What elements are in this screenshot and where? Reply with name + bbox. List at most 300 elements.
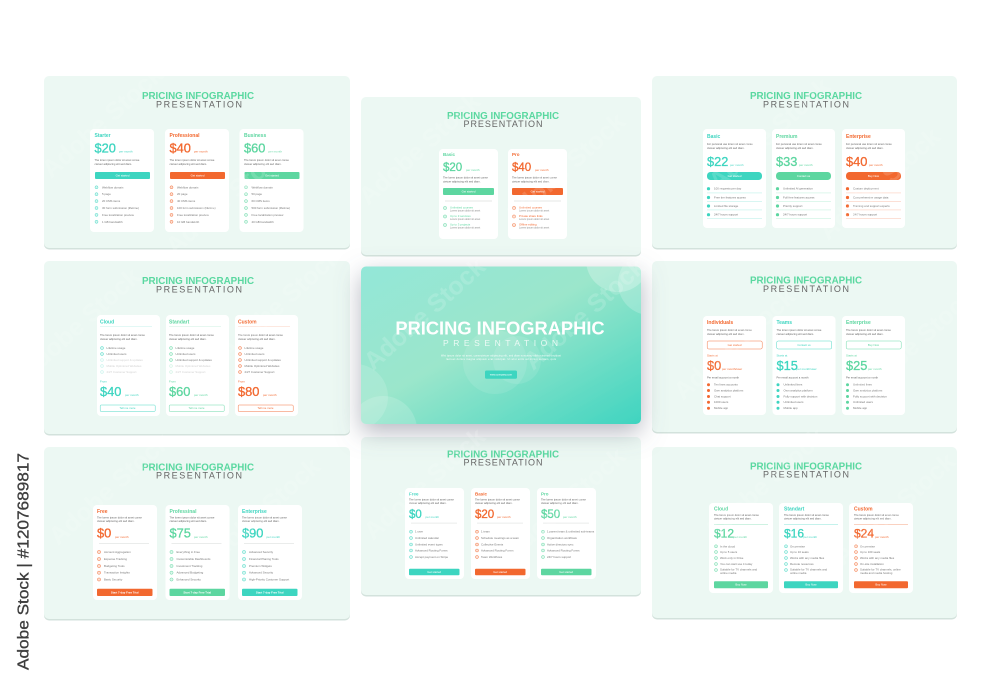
card: Cloud: In the cloud <box>720 544 735 548</box>
watermarks: repeating stock overlay: Adobe Stock <box>519 252 651 376</box>
card: Cloud: $12 <box>714 527 734 541</box>
card: Standard: Standart <box>784 506 805 512</box>
card: Custom: The lorem ipsum dolor sit amet conse <box>854 513 899 517</box>
card: Pro: per month <box>563 515 577 519</box>
card: Standard: The lorem ipsum dolor sit amet conse <box>784 513 829 517</box>
card: Custom: per month <box>263 393 277 397</box>
card: Enterprise: Fully support with decision <box>853 394 887 398</box>
card: Individuals: Chat support <box>714 394 731 398</box>
card: Pro: Private share links <box>519 214 543 218</box>
card: Pro: Pro <box>512 152 520 157</box>
card: Free: Expense Tracking <box>104 557 127 561</box>
card: Premium: ctetuer adipiscing elit sed diam. <box>776 146 814 150</box>
card: Basic: Collective Events <box>481 542 504 546</box>
card: Business: 60 CMS items <box>252 199 270 203</box>
card: Business: per month <box>268 150 282 154</box>
card: Enterprise: $90 <box>242 526 263 541</box>
card: Basic: $22 <box>707 154 728 169</box>
card: Pro: Lorem ipsum dolor sit amet <box>519 226 549 230</box>
card: Basic: ctetuer adipiscing elit sed diam. <box>475 501 513 505</box>
card: Pro: ctetuer adipiscing elit sed diam. <box>512 180 550 184</box>
card: Basic: Free tier features access <box>714 195 746 199</box>
card: Individuals: Own analytics platform <box>714 388 744 392</box>
card: Professional: 10 GB bandwidth <box>177 220 200 224</box>
card: Standard: ctetuer adipiscing elit sed diam. <box>169 337 207 341</box>
card: Standard: Mobile Optimized Websites <box>176 364 211 368</box>
card: Professional: $75 <box>170 526 191 541</box>
card: Teams: Fully support with decision <box>784 394 818 398</box>
card: Enterprise: The lorem ipsum dolor sit amet conse <box>242 516 287 520</box>
card: Cloud: Unlimited support & updates <box>106 358 143 362</box>
card: Cloud: Tell me more <box>119 406 136 410</box>
card: Teams: Per email account a month <box>776 376 809 380</box>
card: Basic: For personal use lorem sit amet conse <box>707 142 753 146</box>
heading: top-centre slide <box>447 111 559 129</box>
card: Starter: 20 CMS items <box>102 199 121 203</box>
card: Pro: 1 parent team & unlimited sub-teams <box>547 530 595 534</box>
heading: middle-right slide <box>750 276 862 294</box>
card: Enterprise <box>842 316 905 415</box>
heading: middle-right slide: PRICING INFOGRAPHIC <box>750 276 862 286</box>
card: Basic <box>439 149 498 239</box>
card: Basic: Get started <box>493 570 508 574</box>
card: Free: Free <box>409 491 419 496</box>
card: Starter: The lorem ipsum dolor sit amet conse <box>94 158 140 162</box>
card: Cloud: Up to 5 users <box>720 550 738 554</box>
card: Enterprise: Starts at <box>846 354 857 358</box>
card: Individuals: Ten lines accounts <box>714 383 738 387</box>
card: Cloud: ctetuer adipiscing elit sed diam. <box>100 337 138 341</box>
card: Pro: Get started <box>531 190 545 194</box>
panel: top-right three-plan pricing slide <box>652 76 957 250</box>
card: Teams: Contact us <box>797 343 811 347</box>
card: Enterprise: Per email account a month <box>846 376 878 380</box>
card: Enterprise: The lorem ipsum dolor sit amet conse <box>846 328 891 332</box>
card: Business: 50 page <box>252 192 262 196</box>
card: Professional: ctetuer adipiscing elit sed diam. <box>170 519 207 523</box>
card: Basic: 1 team <box>481 530 490 534</box>
card: Basic: $20 <box>475 509 494 521</box>
card: Enterprise: High-Priority Customer Support <box>249 578 289 582</box>
heading: bottom-centre slide: PRESENTATION <box>464 458 542 468</box>
card: Basic: 100 requests per day <box>714 186 742 190</box>
card: Custom: media and media hosting <box>860 571 893 575</box>
card: Cloud: Work only in Drive <box>720 556 744 560</box>
card: Pro: Unlimited courses <box>519 206 543 210</box>
card: Standard: online media <box>790 571 807 575</box>
card: Custom: $80 <box>238 384 259 399</box>
card: Basic: Schedule meetings as a team <box>481 536 520 540</box>
card: Pro <box>508 149 567 239</box>
card: Cloud: The lorem ipsum dolor sit amet conse <box>100 333 145 337</box>
card: Custom: 24/7 Customer Support <box>244 370 275 374</box>
card: Free <box>405 488 464 579</box>
card: Basic: Get started <box>728 174 742 178</box>
card: Free <box>93 505 157 600</box>
card: Basic <box>703 129 766 228</box>
card: Custom: ctetuer adipiscing elit sed diam. <box>238 337 276 341</box>
card: Basic: Up to 3 projects <box>450 222 471 226</box>
card: Basic: 24/7 hours support <box>714 212 738 216</box>
card: Premium: Premium <box>776 134 798 140</box>
card: Enterprise: $25 <box>846 358 867 373</box>
watermarks: repeating stock overlay: Adobe Stock <box>354 87 486 211</box>
card: Pro: Lorem ipsum dolor sit amet <box>519 210 549 212</box>
card: Standard: Unlimited support & updates <box>176 358 212 362</box>
card: Cloud: Suitable for TV channels and <box>720 568 757 572</box>
card: Starter: Starter <box>94 133 111 139</box>
card: Free: Budgeting Tools <box>104 564 125 568</box>
panel: centre hero cover slide <box>348 260 654 446</box>
card: Free: The lorem ipsum dolor sit amet conse <box>409 498 454 502</box>
card: Premium: per month <box>799 163 813 167</box>
card: Enterprise <box>842 129 905 228</box>
card: Free: Free <box>97 509 108 515</box>
card: Free: ctetuer adipiscing elit sed diam. <box>409 501 447 505</box>
card: Enterprise: ctetuer adipiscing elit sed diam. <box>846 146 884 150</box>
card: Custom: Works with any media files <box>860 556 895 560</box>
card: Professional <box>166 505 230 600</box>
card: Individuals: per month/user <box>722 367 742 371</box>
card: Custom: Unlimited users <box>244 352 265 356</box>
card: Free: The lorem ipsum dolor sit amet conse <box>97 516 142 520</box>
card: Custom <box>235 315 298 416</box>
card: Enterprise: Mobile app <box>853 406 868 410</box>
card: Individuals: The lorem ipsum dolor sit amet conse <box>707 328 752 332</box>
card: Free: $0 <box>409 509 422 521</box>
card: Enterprise: Premium Widgets <box>249 564 272 568</box>
card: Professional: Start 7-day Free Trial <box>183 590 211 594</box>
watermarks: repeating stock overlay: Adobe Stock <box>499 107 631 231</box>
card: Basic: ctetuer adipiscing elit sed diam. <box>443 180 481 184</box>
card: Free: Account Aggregation <box>104 550 131 554</box>
card: Cloud: Cloud <box>714 506 728 512</box>
card: Teams: ctetuer adipiscing elit sed diam. <box>776 332 814 336</box>
card: Premium: $33 <box>776 154 797 169</box>
card: Pro: Get started <box>559 570 574 574</box>
card: Starter: 1 GB bandwidth <box>102 220 123 224</box>
panel: middle-left three-plan pricing slide <box>44 261 350 436</box>
card: Standard: Unlimited users <box>176 352 196 356</box>
watermarks: repeating stock overlay: Adobe Stock <box>699 422 831 546</box>
text block: vertical stock credit: Adobe Stock | #1207689817 <box>16 453 32 670</box>
heading: top-centre slide: PRICING INFOGRAPHIC <box>447 111 559 122</box>
heading: top-left slide: PRESENTATION <box>156 100 242 110</box>
card: Individuals: Get started <box>728 343 742 347</box>
card: Individuals: Starts at <box>707 354 718 358</box>
watermarks: repeating stock overlay: Adobe Stock <box>359 252 491 376</box>
card: Free: Unlimited calendar <box>415 536 439 540</box>
card: Pro <box>537 488 596 579</box>
card: Pro: Advanced Routing Forms <box>547 548 580 552</box>
card: Professional: 20 page <box>177 192 188 196</box>
card: Pro: Lorem ipsum dolor sit amet <box>519 218 549 221</box>
watermarks: repeating stock overlay <box>14 60 981 576</box>
card: Basic: The lorem ipsum dolor sit amet conse <box>475 498 520 502</box>
heading: bottom-left slide: PRESENTATION <box>156 471 242 481</box>
card: Custom: Custom <box>238 320 257 326</box>
panel: bottom-centre three-plan pricing slide <box>361 437 641 596</box>
card: Business <box>240 129 304 232</box>
watermarks: repeating stock overlay: Adobe Stock <box>814 122 946 246</box>
card: Free: ctetuer adipiscing elit sed diam. <box>97 519 135 523</box>
card: Standard: The lorem ipsum dolor sit amet conse <box>169 333 214 337</box>
card: Cloud: per month <box>734 535 747 539</box>
card: Cloud: 24/7 Customer Support <box>106 370 137 374</box>
card: Standard: Works with any media files <box>790 556 825 560</box>
card: Starter: $20 <box>94 141 116 156</box>
card: Cloud: ctetuer adipiscing elit sed diam. <box>714 517 752 521</box>
card: Teams: Teams <box>776 320 792 326</box>
card: Professional: per month <box>194 150 208 154</box>
card: Professional: ctetuer adipiscing elit sed diam. <box>170 162 207 166</box>
card: Teams: The lorem ipsum dolor sit amet conse <box>776 328 822 332</box>
card: Enterprise: Unlimited lines <box>853 383 872 387</box>
watermarks: repeating stock overlay: Adobe Stock <box>704 72 836 196</box>
card: Teams: Unlimited lines <box>784 383 803 387</box>
card: Free: per month <box>115 535 129 539</box>
card: Individuals: $0 <box>707 358 721 373</box>
card: Free: Start 7-day Free Trial <box>111 590 139 594</box>
card: Standard: From <box>169 380 176 384</box>
card: Business: Free localization preview <box>252 213 284 217</box>
heading: top-right slide: PRESENTATION <box>763 100 849 110</box>
card: Free: per month <box>426 515 439 519</box>
card: Business: ctetuer adipiscing elit sed diam. <box>244 162 282 166</box>
card: Enterprise: Buy Now <box>868 174 880 178</box>
card: Standard: $60 <box>169 384 190 399</box>
card: Cloud <box>709 503 773 593</box>
heading: bottom-left slide <box>142 462 254 481</box>
card: Basic: per month <box>730 163 744 167</box>
card: Professional: The lorem ipsum dolor sit amet conse <box>170 158 215 162</box>
card: Standard: Buy Now <box>805 583 818 587</box>
card: Basic: Lorem ipsum dolor sit amet <box>450 218 480 221</box>
card: Cloud: Unlimited users <box>106 352 127 356</box>
heading: hero title: PRICING INFOGRAPHIC <box>395 318 605 338</box>
card: Teams: Unlimited users <box>784 400 804 404</box>
card: Enterprise: Enterprise <box>846 320 871 326</box>
card: Free: Transaction Insights <box>104 571 130 575</box>
card: Standard: Tell me more <box>188 406 205 410</box>
card: Basic: Basic <box>707 134 721 140</box>
card: Business: 500 form submission (lifetime) <box>252 206 290 210</box>
card: Basic: Lorem ipsum dolor sit amet <box>450 210 480 212</box>
card: Custom: On premise <box>860 544 875 548</box>
watermarks: repeating stock overlay: Adobe Stock <box>359 422 491 546</box>
card: Free: Get started <box>427 570 442 574</box>
card: Basic: Up to 3 services <box>450 214 471 218</box>
watermarks: repeating stock overlay: Adobe Stock <box>849 282 981 406</box>
card: Enterprise: Own analytics platform <box>853 388 883 392</box>
card: Basic: Basic <box>443 152 456 157</box>
card: Business: Webflow domain <box>252 185 273 189</box>
card: Professional: Professional <box>170 133 200 139</box>
card: Custom: Up to 100 seats <box>860 550 881 554</box>
card: Custom: Suitable for TV channels, online <box>860 568 901 572</box>
card: Basic: ctetuer adipiscing elit sed diam. <box>707 146 745 150</box>
heading: top-right slide <box>750 91 862 110</box>
heading: top-left slide: PRICING INFOGRAPHIC <box>142 91 254 102</box>
heading: bottom-centre slide <box>447 450 559 468</box>
card: Basic: Team Workflows <box>481 555 503 559</box>
card: Teams: Starts at <box>776 354 787 358</box>
card: Cloud: Mobile Optimized Websites <box>106 364 142 368</box>
card: Business: Get started <box>265 174 279 178</box>
card: Pro: The lorem ipsum dolor sit amet conse <box>541 498 586 502</box>
card: Free: Accept payment on Stripe <box>415 555 448 559</box>
heading: bottom-centre slide: PRICING INFOGRAPHIC <box>447 450 559 461</box>
button: hero website link <box>485 370 517 379</box>
card: Custom: per month <box>875 535 889 539</box>
card: Professional: Free localization preview <box>177 213 210 217</box>
heading: middle-left slide <box>142 276 254 295</box>
card: Basic: Lorem ipsum dolor sit amet <box>450 226 480 230</box>
text block: hero description: Wisi ipsum dolor sit amet, consectetuer adipiscing elit, sed diam nonummy nibh euismod tincidunt <box>441 354 561 358</box>
watermarks: repeating stock overlay: Adobe Stock <box>829 447 961 571</box>
card: Standard: On premise <box>790 544 805 548</box>
card: Pro: Organization workflows <box>547 536 577 540</box>
card: Professional: Enhanced Security <box>176 578 201 582</box>
heading: middle-right slide: PRESENTATION <box>763 284 849 294</box>
card: Standard: $16 <box>784 527 804 541</box>
card: Custom: The lorem ipsum dolor sit amet conse <box>238 333 283 337</box>
card: Pro: $50 <box>541 509 560 521</box>
card: Cloud: The lorem ipsum dolor sit amet conse <box>714 513 759 517</box>
card: Starter: 5 page <box>102 192 111 196</box>
card: Individuals <box>703 316 766 415</box>
card: Enterprise: Unlimited users <box>853 400 873 404</box>
card: Cloud: From <box>100 380 107 384</box>
card: Standard: per month <box>194 393 208 397</box>
heading: bottom-right slide: PRICING INFOGRAPHIC <box>750 461 862 472</box>
watermarks: repeating stock overlay: Adobe Stock <box>44 427 176 551</box>
heading: top-right slide: PRICING INFOGRAPHIC <box>750 91 862 102</box>
card: Cloud: Cloud <box>100 320 114 326</box>
card: Teams: $15 <box>776 358 798 373</box>
card: Premium: 24/7 hours support <box>783 212 807 216</box>
heading: top-centre slide: PRESENTATION <box>464 119 542 129</box>
card: Basic: Basic <box>475 491 488 496</box>
text block: hero description: laoreet dolore magna aliquam erat volutpat. Ut wisi enim ad minim veniam, quis <box>446 358 557 361</box>
watermarks: repeating stock overlay: Adobe Stock <box>669 282 801 406</box>
card: Professional: 100 form submission (lifetime) <box>177 206 216 210</box>
card: Individuals: Per email account a month <box>707 376 739 380</box>
card: Enterprise: 24/7 hours support <box>853 212 877 216</box>
card: Cloud: online media <box>720 571 737 575</box>
card: Cloud: $40 <box>100 384 121 399</box>
card: Enterprise: ctetuer adipiscing elit sed diam. <box>846 332 884 336</box>
card: Business: The lorem ipsum dolor sit amet conse <box>244 158 289 162</box>
card: Starter: Webflow domain <box>102 185 124 189</box>
card: Enterprise: Buy Now <box>868 343 880 347</box>
card: Custom: On-site installation <box>860 562 884 566</box>
card: Enterprise: Advanced Security <box>249 550 274 554</box>
panel: bottom-right three-plan pricing slide <box>652 447 957 620</box>
card: Professional: per month <box>194 535 208 539</box>
card: Pro: 24/7 hours support <box>547 555 571 559</box>
panel: top-left three-plan pricing slide <box>44 76 350 250</box>
card: Enterprise: Start 7-day Free Trial <box>256 590 284 594</box>
card: Professional: The lorem ipsum dolor sit amet conse <box>170 516 215 520</box>
watermarks: repeating stock overlay: Adobe Stock <box>214 242 346 366</box>
card: Starter: per month <box>119 150 133 154</box>
card: Enterprise: Comprehensive usage data <box>853 195 889 199</box>
card: Enterprise: For personal use lorem sit amet conse <box>846 142 892 146</box>
card: Cloud: You can start use it today <box>720 562 753 566</box>
card: Enterprise <box>238 505 302 600</box>
card: Professional: Customizable Dashboards <box>176 557 211 561</box>
card: Standard <box>166 315 229 416</box>
card: Free: Unlimited event types <box>415 542 443 546</box>
card: Teams: Own analytics platform <box>784 388 813 392</box>
card: Pro: $40 <box>512 162 531 174</box>
card: Professional <box>165 129 229 232</box>
card: Business: Business <box>244 133 266 139</box>
card: Custom: Mobile Optimized Websites <box>244 364 280 368</box>
card: Standard: Remote resources <box>790 562 814 566</box>
card: Enterprise: Training and support experts <box>853 204 890 208</box>
heading: middle-left slide: PRESENTATION <box>156 285 242 295</box>
card: Individuals: Mobile app <box>714 406 729 410</box>
card: Standard: Up to 10 seats <box>790 550 809 554</box>
card: Professional: $40 <box>170 141 191 156</box>
card: Professional: Investment Tracking <box>176 564 203 568</box>
card: Pro: ctetuer adipiscing elit sed diam. <box>541 501 579 505</box>
watermarks: repeating stock overlay: Adobe Stock <box>37 60 169 184</box>
card: Basic: Limited file storage <box>714 204 739 208</box>
watermarks: repeating stock overlay: Adobe Stock <box>14 262 146 386</box>
card: Pro: per month <box>535 168 549 172</box>
card: Business: 40 GB bandwidth <box>252 220 274 224</box>
card: Starter: Free localization preview <box>102 213 135 217</box>
card: Professional: Advanced Budgeting <box>176 571 204 575</box>
card: Professional: Get started <box>191 174 205 178</box>
card: Basic: per month <box>466 168 480 172</box>
panel: bottom-left three-plan pricing slide <box>44 447 350 620</box>
heading: top-left slide <box>142 91 254 110</box>
card: Premium: For personal use lorem sit amet conse <box>776 142 822 146</box>
card: Standard: Lifetime usage <box>176 346 195 350</box>
card: Premium: Contact us <box>797 174 811 178</box>
card: Standard <box>779 503 843 593</box>
panel: top-centre two-plan pricing slide <box>361 97 641 256</box>
card: Cloud <box>97 315 160 416</box>
heading: bottom-left slide: PRICING INFOGRAPHIC <box>142 462 254 474</box>
card: Free: $0 <box>97 526 111 541</box>
card: Basic <box>471 488 530 579</box>
card: Basic: Get started <box>462 190 476 194</box>
card: Cloud: Lifetime usage <box>106 346 126 350</box>
card: Cloud: Buy Now <box>735 583 748 587</box>
card: Free: Advanced Routing Forms <box>415 548 448 552</box>
card: Teams: Mobile app <box>784 406 798 410</box>
card: Pro: Offline editing <box>519 222 537 226</box>
card: Basic: per month <box>497 515 511 519</box>
card: Professional: Webflow domain <box>177 185 199 189</box>
card: Individuals: 1000 users <box>714 400 729 404</box>
card: Custom: $24 <box>854 527 874 541</box>
card: Custom: Tell me more <box>257 406 274 410</box>
card: Custom: Custom <box>854 506 873 512</box>
card: Basic: Unlimited courses <box>450 206 474 210</box>
heading: bottom-right slide: PRESENTATION <box>763 470 849 480</box>
watermarks: repeating stock overlay: Adobe Stock <box>499 442 631 566</box>
heading: bottom-right slide <box>750 461 862 480</box>
card: Individuals: Individuals <box>707 320 733 326</box>
card: Custom: From <box>238 380 245 384</box>
card: Professional: Everything in Free <box>176 550 200 554</box>
